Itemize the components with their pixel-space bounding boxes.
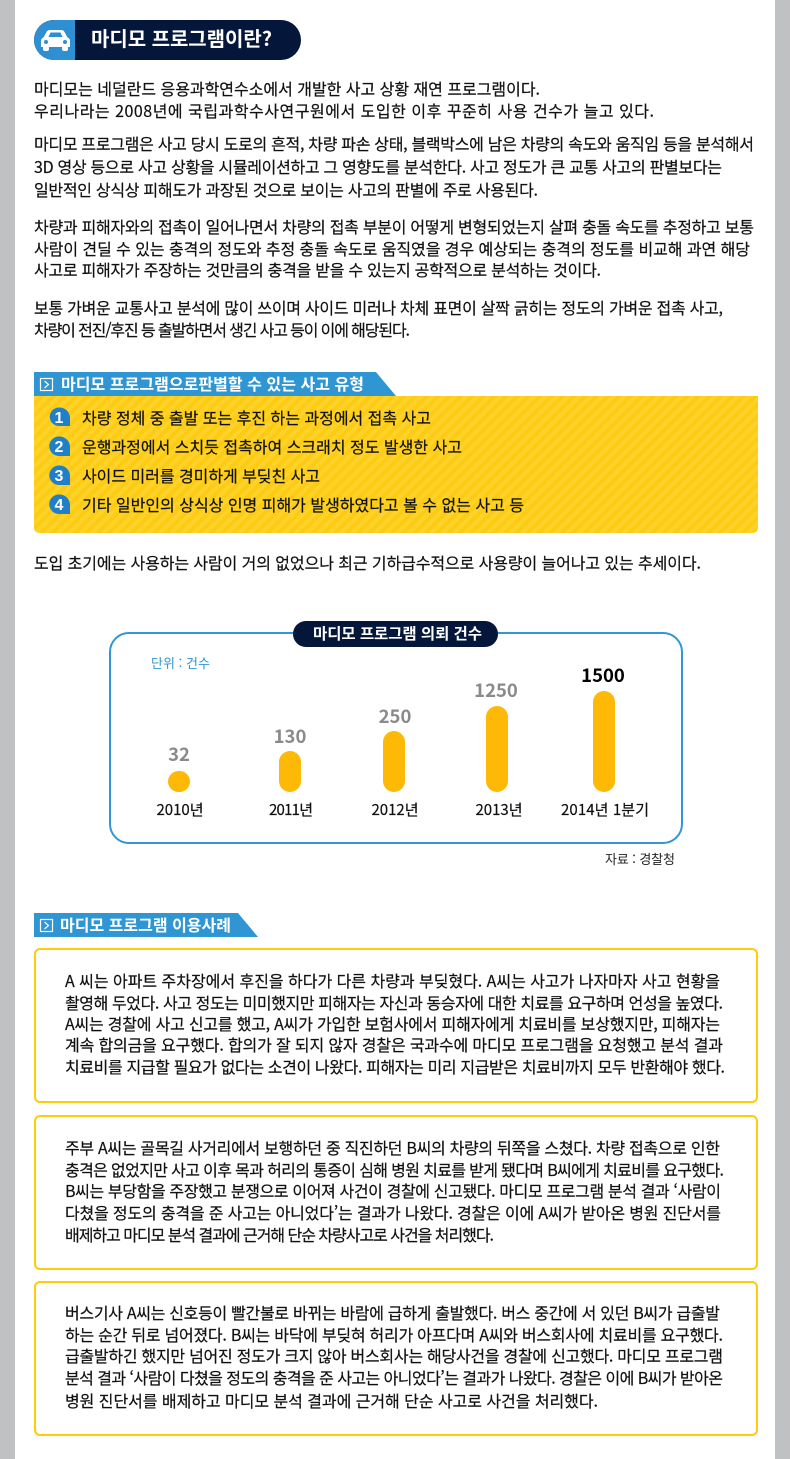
bar: 2011: 130 (274, 723, 306, 749)
panel: case 3: 하는 순간 뒤로 넘어졌다. B씨는 바닥에 부딪혀 허리가 아프다며 A씨와 버스회사에 치료비를 요구했다. (65, 1322, 723, 1346)
item 1: 차량 정체 중 출발 또는 후진 하는 과정에서 접촉 사고 (82, 405, 431, 429)
panel: case 3 (35, 1282, 757, 1435)
item 2: 2 (55, 439, 64, 456)
text block: intro 1 (34, 76, 654, 122)
panel: case 3: 급출발하긴 했지만 넘어진 정도가 크지 않아 버스회사는 해당사건을 경찰에 신고했다. 마디모 프로그램 (65, 1343, 723, 1367)
text block: intro 3: 차량과 피해자와의 접촉이 일어나면서 차량의 접촉 부분이 어떻게 변형되었는지 살펴 충돌 속도를 추정하고 보통 (34, 214, 754, 238)
heading: use cases: 마디모 프로그램 이용사례 (60, 912, 231, 936)
panel: case 3: 분석 결과 ‘사람이 다쳤을 정도의 충격을 준 사고는 아니었다’는 결과가 나왔다. 경찰은 이에 B씨가 받아온 (65, 1365, 723, 1389)
text block: intro 3: 사고로 피해자가 주장하는 것만큼의 충격을 받을 수 있는지 공학적으로 분석하는 것이다. (34, 257, 601, 281)
panel: case 1: A 씨는 아파트 주차장에서 후진을 하다가 다른 차량과 부딪혔다. A씨는 사고가 나자마자 사고 현황을 (65, 968, 720, 992)
panel: case 1 (35, 949, 757, 1102)
chart title (293, 621, 498, 647)
bar: 2012 (372, 703, 418, 820)
title: 마디모 프로그램이란? (91, 23, 272, 52)
panel: case 1: 계속 합의금을 요구했다. 합의가 잘 되지 않자 경찰은 국과수에 마디모 프로그램을 요청했고 분석 결과 (65, 1032, 723, 1056)
bar: 2013: 2013년 (476, 799, 522, 820)
panel: bar chart (110, 621, 682, 843)
panel: case 3: 버스기사 A씨는 신호등이 빨간불로 바뀌는 바람에 급하게 출발했다. 버스 중간에 서 있던 B씨가 급출발 (65, 1300, 720, 1324)
item 1: 1 (55, 410, 64, 427)
panel: accident types (34, 371, 758, 533)
title (34, 20, 301, 60)
item 4: 4 (55, 497, 64, 514)
item 4: 기타 일반인의 상식상 인명 피해가 발생하였다고 볼 수 없는 사고 등 (82, 492, 524, 516)
bar: 2013: 1250 (474, 677, 518, 703)
text block: intro 4: 보통 가벼운 교통사고 분석에 많이 쓰이며 사이드 미러나 차체 표면이 살짝 긁히는 정도의 가벼운 접촉 사고, (34, 295, 723, 319)
item 2: 운행과정에서 스치듯 접촉하여 스크래치 정도 발생한 사고 (82, 434, 462, 458)
text block: intro 3 (34, 214, 754, 281)
bar: 2011 (269, 723, 313, 820)
item 3: 3 (55, 468, 64, 485)
text block: intro 2 (34, 131, 754, 201)
text block: intro 1: 우리나라는 2008년에 국립과학수사연구원에서 도입한 이후 꾸준히 사용 건수가 늘고 있다. (34, 98, 654, 122)
bar: 2014 Q1: 1500 (581, 662, 625, 688)
text block: trend: 도입 초기에는 사용하는 사람이 거의 없었으나 최근 기하급수적으로 사용량이 늘어나고 있는 추세이다. (34, 550, 701, 574)
bar: 2014 Q1: 2014년 1분기 (561, 799, 649, 820)
text block: intro 3: 사람이 견딜 수 있는 충격의 정도와 추정 충돌 속도로 움직였을 경우 예상되는 충격의 정도를 비교해 과연 해당 (34, 236, 750, 260)
bar: 2012: 2012년 (372, 799, 418, 820)
panel: case 2: 충격은 없었지만 사고 이후 목과 허리의 통증이 심해 병원 치료를 받게 됐다며 B씨에게 치료비를 요구했다. (65, 1157, 724, 1181)
bar: 2010 (156, 741, 204, 820)
text block: intro 4 (34, 295, 723, 341)
chart title: 마디모 프로그램 의뢰 건수 (313, 622, 482, 644)
text block: intro 4: 차량이 전진/후진 등 출발하면서 생긴 사고 등이 이에 해당된다. (34, 317, 410, 341)
panel: case 2 (35, 1116, 757, 1269)
panel: case 1: 촬영해 두었다. 사고 정도는 미미했지만 피해자는 자신과 동승자에 대한 치료를 요구하며 언성을 높였다. (65, 990, 723, 1014)
bar: 2010: 2010년 (156, 799, 204, 820)
text block: intro 2: 일반적인 상식상 피해도가 과장된 것으로 보이는 사고의 판별에 주로 사용된다. (34, 177, 538, 201)
text block: intro 1: 마디모는 네덜란드 응용과학연수소에서 개발한 사고 상황 재연 프로그램이다. (34, 76, 540, 100)
bar: 2013 (474, 677, 522, 820)
bar: 2014 Q1 (561, 662, 649, 820)
heading: accident types: 마디모 프로그램으로판별할 수 있는 사고 유형 (61, 371, 364, 395)
unit label: 단위 : 건수 (151, 653, 210, 672)
panel: case 2: 다쳤을 정도의 충격을 준 사고는 아니었다’는 결과가 나왔다. 경찰은 이에 A씨가 받아온 병원 진단서를 (65, 1200, 721, 1224)
bar: 2012: 250 (379, 703, 411, 729)
source: 자료 : 경찰청 (605, 849, 675, 868)
bar: 2011: 2011년 (269, 799, 313, 820)
icon: car (41, 30, 70, 51)
panel: case 3: 병원 진단서를 배제하고 마디모 분석 결과에 근거해 단순 사고로 사건을 처리했다. (65, 1388, 598, 1412)
panel: case 2: 주부 A씨는 골목길 사거리에서 보행하던 중 직진하던 B씨의 차량의 뒤쪽을 스쳤다. 차량 접촉으로 인한 (65, 1135, 720, 1159)
panel: case 2: B씨는 부당함을 주장했고 분쟁으로 이어져 사건이 경찰에 신고됐다. 마디모 프로그램 분석 결과 ‘사람이 (65, 1178, 721, 1202)
text block: intro 2: 마디모 프로그램은 사고 당시 도로의 흔적, 차량 파손 상태, 블랙박스에 남은 차량의 속도와 움직임 등을 분석해서 (34, 131, 754, 155)
panel: case 2: 배제하고 마디모 분석 결과에 근거해 단순 차량사고로 사건을 처리했다. (65, 1222, 494, 1246)
panel: case 1: A씨는 경찰에 사고 신고를 했고, A씨가 가입한 보험사에서 피해자에게 치료비를 보상했지만, 피해자는 (65, 1011, 720, 1035)
text block: intro 2: 3D 영상 등으로 사고 상황을 시뮬레이션하고 그 영향도를 분석한다. 사고 정도가 큰 교통 사고의 판별보다는 (34, 154, 722, 178)
item 3: 사이드 미러를 경미하게 부딪친 사고 (82, 463, 320, 487)
panel: case 1: 치료비를 지급할 필요가 없다는 소견이 나왔다. 피해자는 미리 지급받은 치료비까지 모두 반환해야 했다. (65, 1054, 725, 1078)
bar: 2010: 32 (168, 741, 190, 767)
